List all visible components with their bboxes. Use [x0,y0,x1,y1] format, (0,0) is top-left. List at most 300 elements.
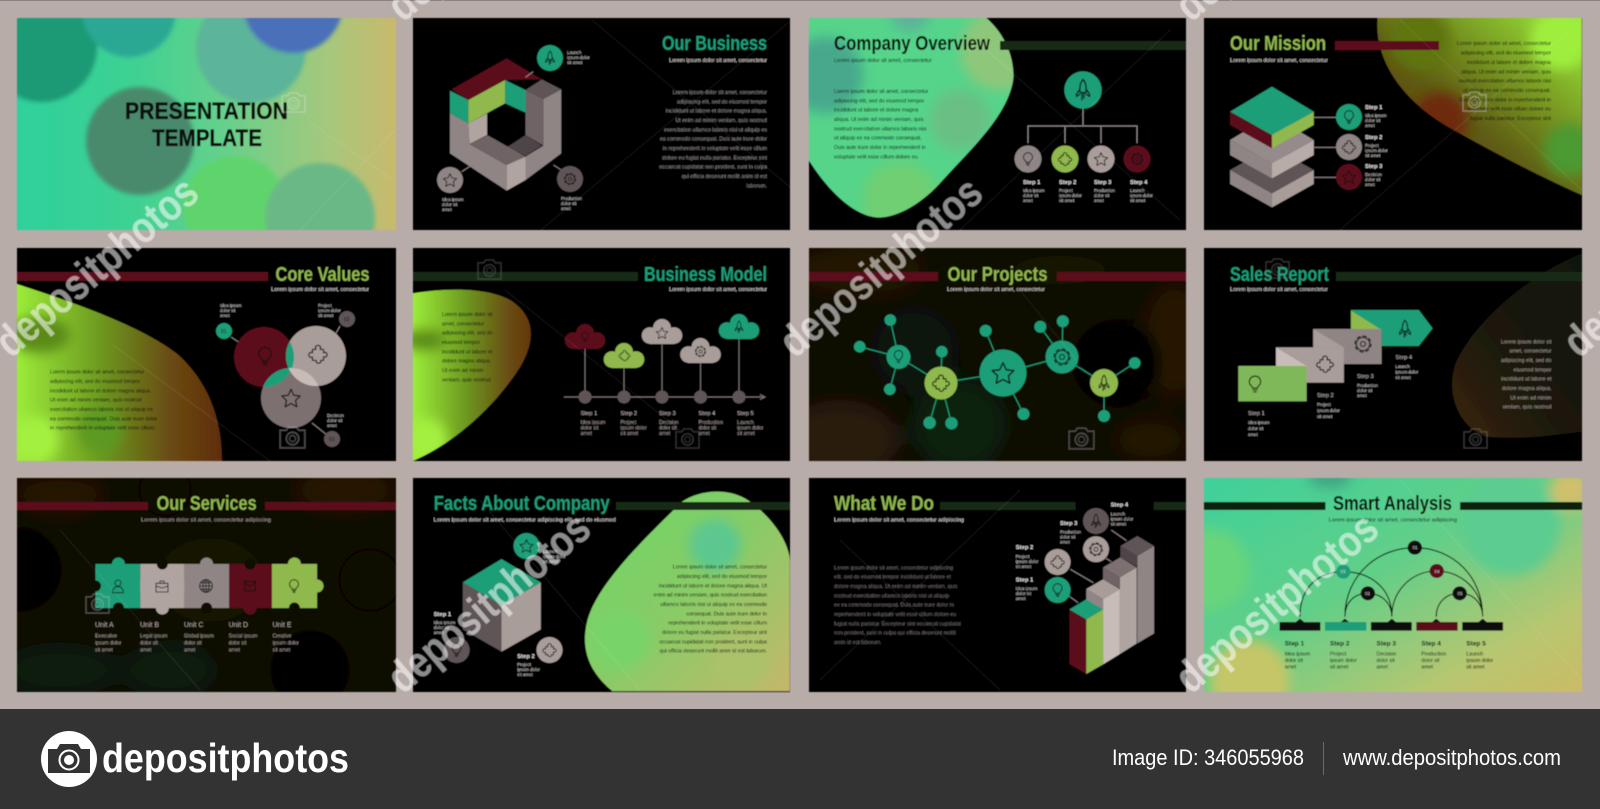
panel: cover slide [16,17,396,231]
unit labels: Unit A [95,622,114,629]
step labels: ipsum dolor [1016,559,1039,564]
unit labels: dolor sit [229,641,247,647]
body text: dolore eu fugiat nulla pariatur. Excepteur sint [662,155,768,161]
body text: consequat. Duis aute irure dolor in [686,611,767,617]
heading: Company Overview [834,33,990,55]
body text: ut aliquip ex ea commodo consequat. [834,136,922,142]
heading: Lorem ipsum dolor sit amet, consectetur [271,287,369,293]
bokeh circles [1204,478,1582,692]
step labels: dolor sit [1365,177,1381,182]
callout labels: amet [561,206,572,211]
step labels: Project [517,662,532,667]
callout labels: dolor sit [220,308,236,313]
step labels: sit amet [1016,564,1032,569]
unit labels: dolor sit [140,641,158,647]
step labels: Step 2 [517,654,535,660]
body text: dolore magna aliqua. [1502,386,1552,392]
body text [50,370,157,432]
body text: Lorem ipsum dolor sit [1501,339,1552,345]
venn diagram [216,311,355,447]
step labels: ipsum dolor [1317,408,1340,413]
body text: adipiscing elit, sed do eiusmod tempor [50,379,140,385]
step labels: Decision [1376,651,1397,657]
panel: what we do [809,478,1186,692]
heading: Our Services [157,493,257,515]
body text: incididunt ut labore et dolore magna aliqua. [666,109,767,115]
step labels: Idea ipsum [434,620,456,625]
node numbers [1340,545,1463,596]
heading [1230,33,1328,64]
panel: smart analysis [1203,477,1583,692]
unit labels: ipsum dolor [95,641,122,647]
heading: What We Do [834,493,934,515]
step labels [1016,503,1134,601]
unit labels: dolor sit [184,641,202,647]
body text: voluptate velit esse cillum dolore eu [834,154,918,160]
unit labels: sit amet [95,648,113,654]
fire blob [412,288,532,462]
step labels: Step 4 [1130,180,1148,186]
step labels: Step 3 [1357,374,1374,380]
heading: Lorem ipsum dolor sit amet, consectetur [1230,287,1328,293]
fire blob [1376,17,1582,196]
step labels: Decision [659,420,679,426]
unit labels: Unit C [184,622,203,629]
step labels: sit amet [1317,414,1333,419]
step labels: Idea ipsum [1248,420,1270,425]
step labels: Production [1094,188,1116,193]
heading [834,493,964,524]
step labels: ipsum dolor [1111,516,1134,521]
step labels: ipsum dolor [1395,370,1419,374]
step labels: amet [1376,665,1389,671]
step labels [1248,355,1419,437]
step labels: ipsum dolor [1365,148,1388,153]
callout labels: sit amet [567,60,583,65]
step labels: Step 4 [1395,355,1413,361]
icon: star circle [437,167,463,193]
body text: Ut enim ad minim [442,368,484,374]
body text: adipiscing elit, sed do [1501,358,1552,364]
step labels [434,549,566,677]
step labels: Step 1 [581,411,597,417]
cloud timeline [564,314,765,404]
step labels: ipsum dolor [1330,658,1357,664]
body text: Ut enim ad minim [1510,395,1552,401]
image id: Image ID: 346055968 [1112,745,1304,770]
icon: gear circle [557,166,583,192]
body text: adipiscing elit, sed do eiusmod tempor [677,99,767,105]
unit labels: Creative [272,634,292,640]
step labels: Idea ipsum [581,420,606,426]
step labels: Project [1016,554,1030,559]
body text: Lorem ipsum dolor sit amet, consectetur [50,370,144,376]
step labels: Step 2 [1016,545,1033,551]
step labels: Production [1357,383,1379,388]
callout labels: Idea ipsum [442,197,464,202]
body text [834,565,961,646]
body text: dolore magna aliqua. [442,359,491,365]
step labels: Step 2 [1317,393,1334,399]
body text: adipiscing elit, sed do [442,331,493,337]
heading: Lorem ipsum dolor sit amet, consectetur [1230,58,1328,64]
step labels: sit amet [1466,665,1485,671]
step labels: Step 5 [737,411,754,417]
step labels: Project [1365,143,1379,148]
step labels: Step 3 [1060,521,1078,527]
unit labels: amet [140,648,152,654]
step labels: amet [1365,123,1376,128]
body text: adipiscing elit, sed do eiusmod tempor [834,98,924,104]
body text: Ut enim ad minim veniam, quis nostrud [675,118,767,124]
arc network [1280,541,1503,631]
step labels [1023,180,1153,203]
step labels: dolor sit [1365,118,1381,123]
step labels: Idea ipsum [1365,113,1387,118]
body text: eiusmod tempor [1514,367,1552,373]
card icons [1249,320,1410,392]
step labels: amet [1016,596,1026,601]
green blob [575,478,790,692]
body text: dolore eu fugiat nulla pariatur. Excepteur sint [662,630,768,636]
body text: enim ad minim veniam, quis nostrud exercitation [654,593,767,599]
body text: reprehenderit in voluptate velit esse cillum [668,621,768,627]
fire blob [10,280,223,464]
step labels: dolor sit [659,426,677,432]
callout labels: Idea ipsum [220,303,242,308]
step labels: sit amet [1059,198,1075,203]
step labels: Launch [1395,364,1410,369]
website url: www.depositphotos.com [1342,745,1561,770]
node numbers: 05 [1458,591,1463,596]
step labels: dolor sit [1357,388,1373,393]
heading: Core Values [276,264,370,286]
body text: occaecat cupidatat non proident, sunt in culpa [659,165,767,171]
body text: Duis aute irure dolor in reprehenderit in [834,145,926,151]
body text: ea commodo consequat. Duis aute irure dolor [660,137,767,143]
node numbers: 01 [1412,545,1418,550]
heading [434,493,616,524]
heading: Lorem ipsum dolor sit amet, consectetur [669,58,767,64]
body text: aliqua. Ut enim ad minim veniam, quis [1462,69,1551,75]
green blob [808,17,1014,218]
step labels: Step 1 [434,612,452,618]
brand wordmark: depositphotos [102,735,349,781]
heading [644,264,767,293]
node numbers: 04 [1434,569,1440,574]
dark blob [1452,253,1582,438]
heading [1230,264,1329,293]
step labels: Step 1 [1023,180,1041,186]
body text: incididunt ut labore et [1501,377,1552,383]
unit labels: Executive [95,634,117,640]
step labels: Step 2 [1059,180,1076,186]
panel: core values [10,248,396,464]
cover title [125,98,288,152]
body text: elit, sed do eiusmod tempor incididunt ut labore et [834,575,951,581]
body text: ex ea commodo consequat. Duis aute irure dolor in [834,603,954,609]
step labels: dolor sit [434,625,450,630]
step labels: Launch [1111,511,1126,516]
panel: sales report [1204,248,1582,461]
callout labels: amet [220,313,231,318]
body text: incididunt ut labore et [442,349,493,355]
stepped arrow cards [1238,310,1433,401]
heading [834,33,990,64]
body text [1501,339,1552,411]
heading: Facts About Company [434,493,610,515]
icon: depositphotos logo [41,731,97,787]
step labels: dolor sit [1248,426,1264,431]
callout labels: amet [327,423,338,428]
step labels: ipsum dolor [1466,658,1493,664]
body text [1457,41,1552,122]
step labels: ipsum dolor [737,426,764,432]
body text: Lorem ipsum dolor sit [442,312,493,318]
step labels: amet [1023,198,1034,203]
panel: our projects [808,247,1187,462]
step labels: Project [1059,188,1073,193]
heading: Lorem ipsum dolor sit amet, consectetur adipiscing [1329,518,1457,524]
step labels: Step 2 [1330,640,1350,648]
heading [662,33,767,64]
venn diagram: 03 [329,437,335,443]
step labels: sit amet [1395,375,1412,380]
step labels [1285,640,1493,671]
watermark: depositphotos: depositphotos [378,503,600,703]
puzzle chain [90,558,324,614]
step labels: Production [698,420,723,426]
heading [271,264,370,293]
body text: laborum. [746,183,767,189]
heading: Lorem ipsum dolor sit amet, consectetur [669,287,767,293]
step labels: ipsum dolor [517,667,541,672]
step labels: Project [620,420,637,426]
callout labels: Project [318,303,332,308]
icon circles [1045,508,1109,603]
body text: ea commodo consequat. Duis aute irure dolor [50,416,157,422]
body text: Lorem ipsum dolor sit amet, consectetur adipiscing [834,565,953,571]
unit labels: amet [229,648,241,654]
body text: nostrud exercitation ullamco laboris nisi [1459,79,1551,85]
step labels: dolor sit [698,426,717,432]
heading: Our Mission [1230,33,1326,55]
venn diagram: 02 [344,317,350,323]
panel: facts about company [413,478,790,692]
body text [659,90,768,189]
body text: adipiscing elit, sed do eiusmod tempor [677,574,767,580]
unit labels: Unit E [272,622,292,629]
step labels [581,411,764,437]
body text: anim id est laborum. [834,640,882,646]
body text: amet, consectetur [442,321,484,327]
heading [141,493,271,524]
step labels: ipsum dolor [1130,193,1153,198]
org chart [1014,71,1150,172]
unit labels: amet [184,648,196,654]
body text: reprehenderit in voluptate velit esse cillum dolore eu [834,612,956,618]
body text: Ut enim ad minim veniam, quis nostrud [50,398,142,404]
body text: qui officia deserunt mollit anim id est [682,174,768,180]
body text: incididunt ut labore et dolore magna [1467,60,1551,66]
unit labels: Legal ipsum [140,634,167,640]
step labels: amet [1285,665,1297,671]
step labels: amet [1248,432,1259,437]
bokeh circles [16,17,378,230]
heading: Sales Report [1230,264,1329,286]
step labels: Step 4 [698,411,716,417]
body text: Lorem ipsum dolor sit amet, consectetur [1457,41,1551,47]
body text: Lorem ipsum dolor sit amet, consectetur [673,90,767,96]
body text: voluptate velit esse cillum dolore eu [1467,107,1551,113]
step labels: amet [698,431,710,437]
cover title: PRESENTATION [125,98,288,125]
dark bokeh background [808,248,1186,462]
callout labels: dolor sit [327,418,343,423]
step labels: Step 2 [620,411,637,417]
callout labels: amet [442,207,453,212]
node numbers: 02 [1365,591,1371,596]
step labels: Step 5 [1466,640,1486,648]
icon circles [444,533,562,663]
step labels: ipsum dolor [620,426,647,432]
footer bar [0,709,1600,809]
step labels: dolor sit [1016,591,1032,596]
body text: incididunt ut labore et dolore magna aliqua. [50,388,151,394]
step labels: dolor sit [1023,193,1039,198]
step labels: sit amet [543,559,559,564]
step labels: Production [1060,530,1082,535]
isometric cube [463,559,541,652]
step labels: dolor sit [1376,658,1395,664]
body text: qui officia deserunt mollit anim id est laborum. [660,649,767,655]
step labels: Launch [737,420,754,426]
step labels: Step 3 [659,411,676,417]
unit labels: Unit D [229,622,248,629]
step labels: Project [1330,651,1347,657]
heading: Business Model [644,264,767,286]
step icons [1336,104,1362,190]
step labels: amet [581,431,593,437]
step labels: Launch [1466,651,1483,657]
heading: Our Business [662,33,767,55]
body text: adipiscing elit, sed do eiusmod tempor [1461,50,1551,56]
unit labels [95,622,299,654]
body text: aliqua. Ut enim ad minim veniam, quis [834,117,924,123]
step labels: Step 4 [1111,503,1129,509]
body text: occaecat cupidatat non proident, sunt in culpa [659,639,767,645]
network diagram [854,314,1140,429]
step labels: Step 2 [1365,135,1382,141]
body text: Duis aute irure dolor in reprehenderit in [1459,97,1551,103]
step labels: dolor sit [1421,658,1440,664]
unit labels: Social ipsum [229,634,257,640]
body text: non proident, sunt in culpa qui officia deserunt mollit [834,631,956,637]
step labels: amet [1060,540,1071,545]
callout labels: sit amet [318,313,334,318]
panel: our mission [1204,10,1596,230]
cover title: TEMPLATE [152,125,262,152]
step labels: Project [1317,402,1331,407]
heading: Lorem ipsum dolor sit amet, consectetur [947,287,1045,293]
body text [442,312,493,383]
body text: dolore magna aliqua. Ut enim ad minim veniam, quis [834,584,958,590]
heading [1329,493,1457,524]
heading: Lorem ipsum dolor sit amet, consectetur adipiscing [141,518,271,524]
body text [834,89,928,160]
panel: our services [0,465,400,708]
step labels: Idea ipsum [1023,188,1045,193]
unit labels: Global ipsum [184,634,214,640]
step labels: Launch [1130,188,1145,193]
body text: incididunt ut labore et dolore magna aliqua. Ut [659,583,768,589]
callout labels: dolor sit [442,202,458,207]
step labels: amet [434,630,444,635]
heading: Lorem ipsum dolor sit amet, consectetur [834,58,932,64]
step labels: Step 3 [1365,164,1383,170]
panel: our business [413,18,790,230]
body text: fugiat nulla pariatur. Excepteur sint occaecat cupidatat [834,621,961,627]
body text: ut aliquip ex ea commodo consequat. [1463,88,1551,94]
step labels: Decision [1365,172,1382,177]
callout labels: ipsum dolor [318,308,341,313]
step labels: sit amet [517,672,533,677]
body text: fugiat nulla pariatur. Excepteur sint [1470,116,1552,122]
callout labels [220,303,344,428]
body text [654,565,768,655]
step labels: amet [1357,393,1368,398]
dark bokeh background [16,478,396,692]
step labels: ipsum dolor [1059,193,1082,198]
step labels: amet [1421,665,1433,671]
step labels: Idea ipsum [1016,586,1038,591]
step labels: sit amet [1330,665,1349,671]
heading: Lorem ipsum dolor sit amet, consectetur adipiscing elit, sed do eiusmod [434,518,616,524]
step labels: amet [1365,182,1376,187]
step labels: dolor sit [581,426,599,432]
heading: Lorem ipsum dolor sit amet, consectetur adipiscing [834,518,964,524]
callout labels: Production [561,196,583,201]
unit labels: Unit B [140,622,159,629]
isometric hexagon [450,58,561,191]
step labels: Step 1 [1248,411,1265,417]
watermark: depositphotos: depositphotos [770,167,992,367]
body text: amet, consectetur [1509,349,1552,355]
body text: in reprehenderit in voluptate velit esse cillum. [50,426,156,432]
step labels: Step 4 [1421,640,1441,648]
step labels: sit amet [1111,521,1127,526]
callout labels: Launch [567,50,582,55]
step labels: Step 1 [1285,640,1305,648]
step labels: Production [1421,651,1446,657]
node numbers: 03 [1340,569,1346,574]
body text: in reprehenderit in voluptate velit esse cillum [663,146,768,152]
isometric bars [1069,530,1154,674]
step labels: sit amet [620,431,639,437]
callout labels: ipsum dolor [567,55,590,60]
step labels: dolor sit [1094,193,1110,198]
body text: ullamco laboris nisi ut aliquip ex ea commodo [660,602,767,608]
step labels [1365,105,1388,187]
panel: business model [403,248,790,462]
step labels: dolor sit [1285,658,1303,664]
step labels: Step 3 [1376,640,1396,648]
icon: stock camera watermarks [86,92,1487,613]
step labels: Step 1 [1365,105,1383,111]
venn diagram: 01 [221,329,227,335]
heading [947,264,1048,293]
step labels: sit amet [737,431,755,437]
